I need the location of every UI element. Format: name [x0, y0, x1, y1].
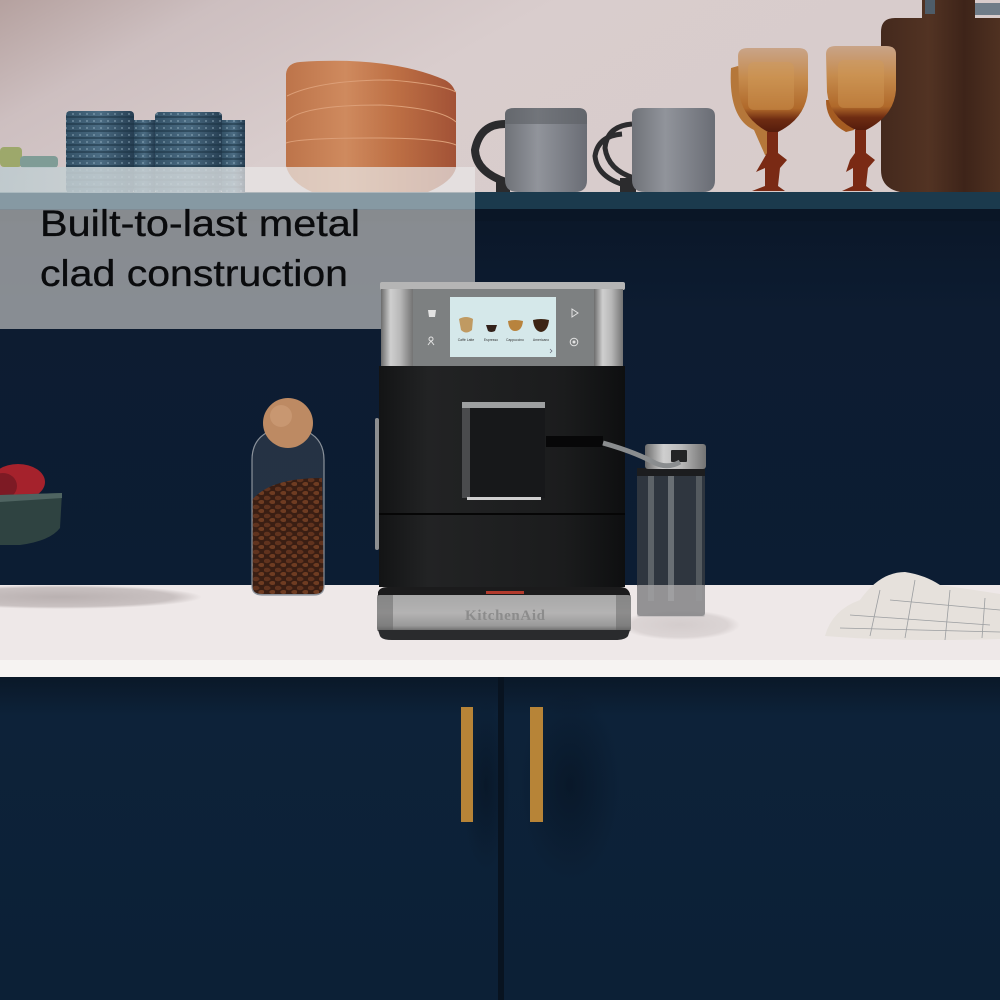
mug 2 — [595, 108, 715, 192]
marble bowl with apples — [0, 464, 62, 545]
touchscreen: Cappuccino — [506, 338, 524, 342]
linen towel — [825, 572, 1000, 640]
icon: stop button — [570, 338, 578, 346]
lower cabinets — [0, 677, 1000, 1000]
control panel — [413, 289, 594, 366]
touchscreen: Americano — [533, 338, 549, 342]
cutting board — [881, 0, 1000, 192]
touchscreen: Caffè Latte — [458, 338, 474, 342]
amber goblet pair 2 — [826, 46, 896, 191]
touchscreen: Espresso — [484, 338, 498, 342]
body seam — [379, 513, 625, 515]
steel side left — [381, 289, 413, 366]
drip tray base — [377, 587, 631, 640]
brew head — [462, 402, 545, 500]
stacked terracotta bowls — [286, 61, 456, 192]
countertop — [0, 585, 1000, 677]
touchscreen — [450, 297, 556, 357]
side handle strip — [375, 418, 379, 550]
brand logo: KitchenAid — [465, 608, 546, 624]
milk container — [637, 444, 706, 617]
icon: cup button — [428, 310, 436, 317]
caption panel — [0, 193, 475, 329]
mug 1 — [475, 108, 587, 192]
top cap — [380, 282, 625, 290]
cabinet handle left — [461, 707, 473, 822]
milk tube — [546, 436, 680, 466]
upper black body — [379, 366, 625, 513]
caption heading — [40, 202, 360, 294]
amber goblet pair 1 — [731, 48, 808, 191]
caption heading: Built-to-last metal — [40, 202, 360, 244]
icon: person button — [428, 337, 434, 345]
cabinet handle right — [530, 707, 543, 822]
lower black body — [379, 515, 625, 587]
blue tint of band — [0, 167, 245, 193]
shelf — [0, 192, 1000, 221]
caption heading: clad construction — [40, 252, 348, 294]
object: small plates on shelf — [0, 147, 58, 168]
steel side right — [594, 289, 623, 366]
coffee machine — [375, 282, 680, 640]
upper wall — [0, 0, 1000, 193]
translucent white band — [0, 167, 475, 193]
blue textured glasses — [66, 111, 245, 193]
navy back wall — [0, 193, 1000, 588]
coffee bean jar — [252, 398, 324, 595]
icon: play button — [572, 309, 578, 317]
